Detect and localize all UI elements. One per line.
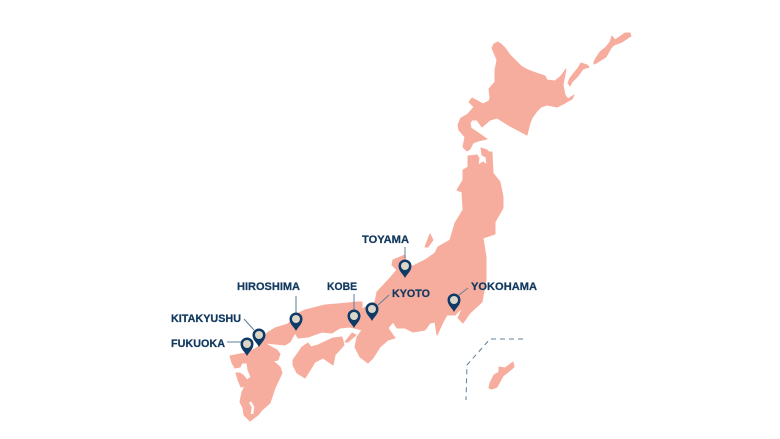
pin: Hiroshima (290, 312, 302, 331)
Hokkaido (458, 42, 574, 151)
leader lines (227, 247, 468, 342)
Awaji island (345, 333, 356, 342)
Okinawa (489, 362, 514, 389)
label: Toyama: TOYAMA (362, 234, 409, 246)
Okinawa inset dashed boundary (466, 339, 523, 400)
pin: Kobe (348, 310, 360, 328)
pin: Yokohama (448, 294, 460, 312)
label: Kyoto: KYOTO (392, 288, 430, 300)
label: Yokohama: YOKOHAMA (471, 281, 537, 293)
Honshu (258, 148, 503, 363)
pin: Fukuoka (240, 338, 254, 356)
pin: Toyama (398, 260, 412, 278)
landmass (230, 33, 631, 421)
pin: Kyoto (366, 302, 378, 321)
label: Fukuoka: FUKUOKA (171, 338, 225, 350)
Shikoku (293, 337, 344, 378)
label: Kobe: KOBE (327, 281, 357, 293)
label: Hiroshima: HIROSHIMA (237, 281, 300, 293)
Sado island (425, 234, 433, 247)
pin: Kitakyushu (252, 328, 266, 347)
Kyushu (230, 343, 282, 421)
label: Kitakyushu: KITAKYUSHU (171, 313, 241, 325)
Kagoshima bay (250, 402, 253, 414)
Kuril islands (568, 33, 631, 86)
